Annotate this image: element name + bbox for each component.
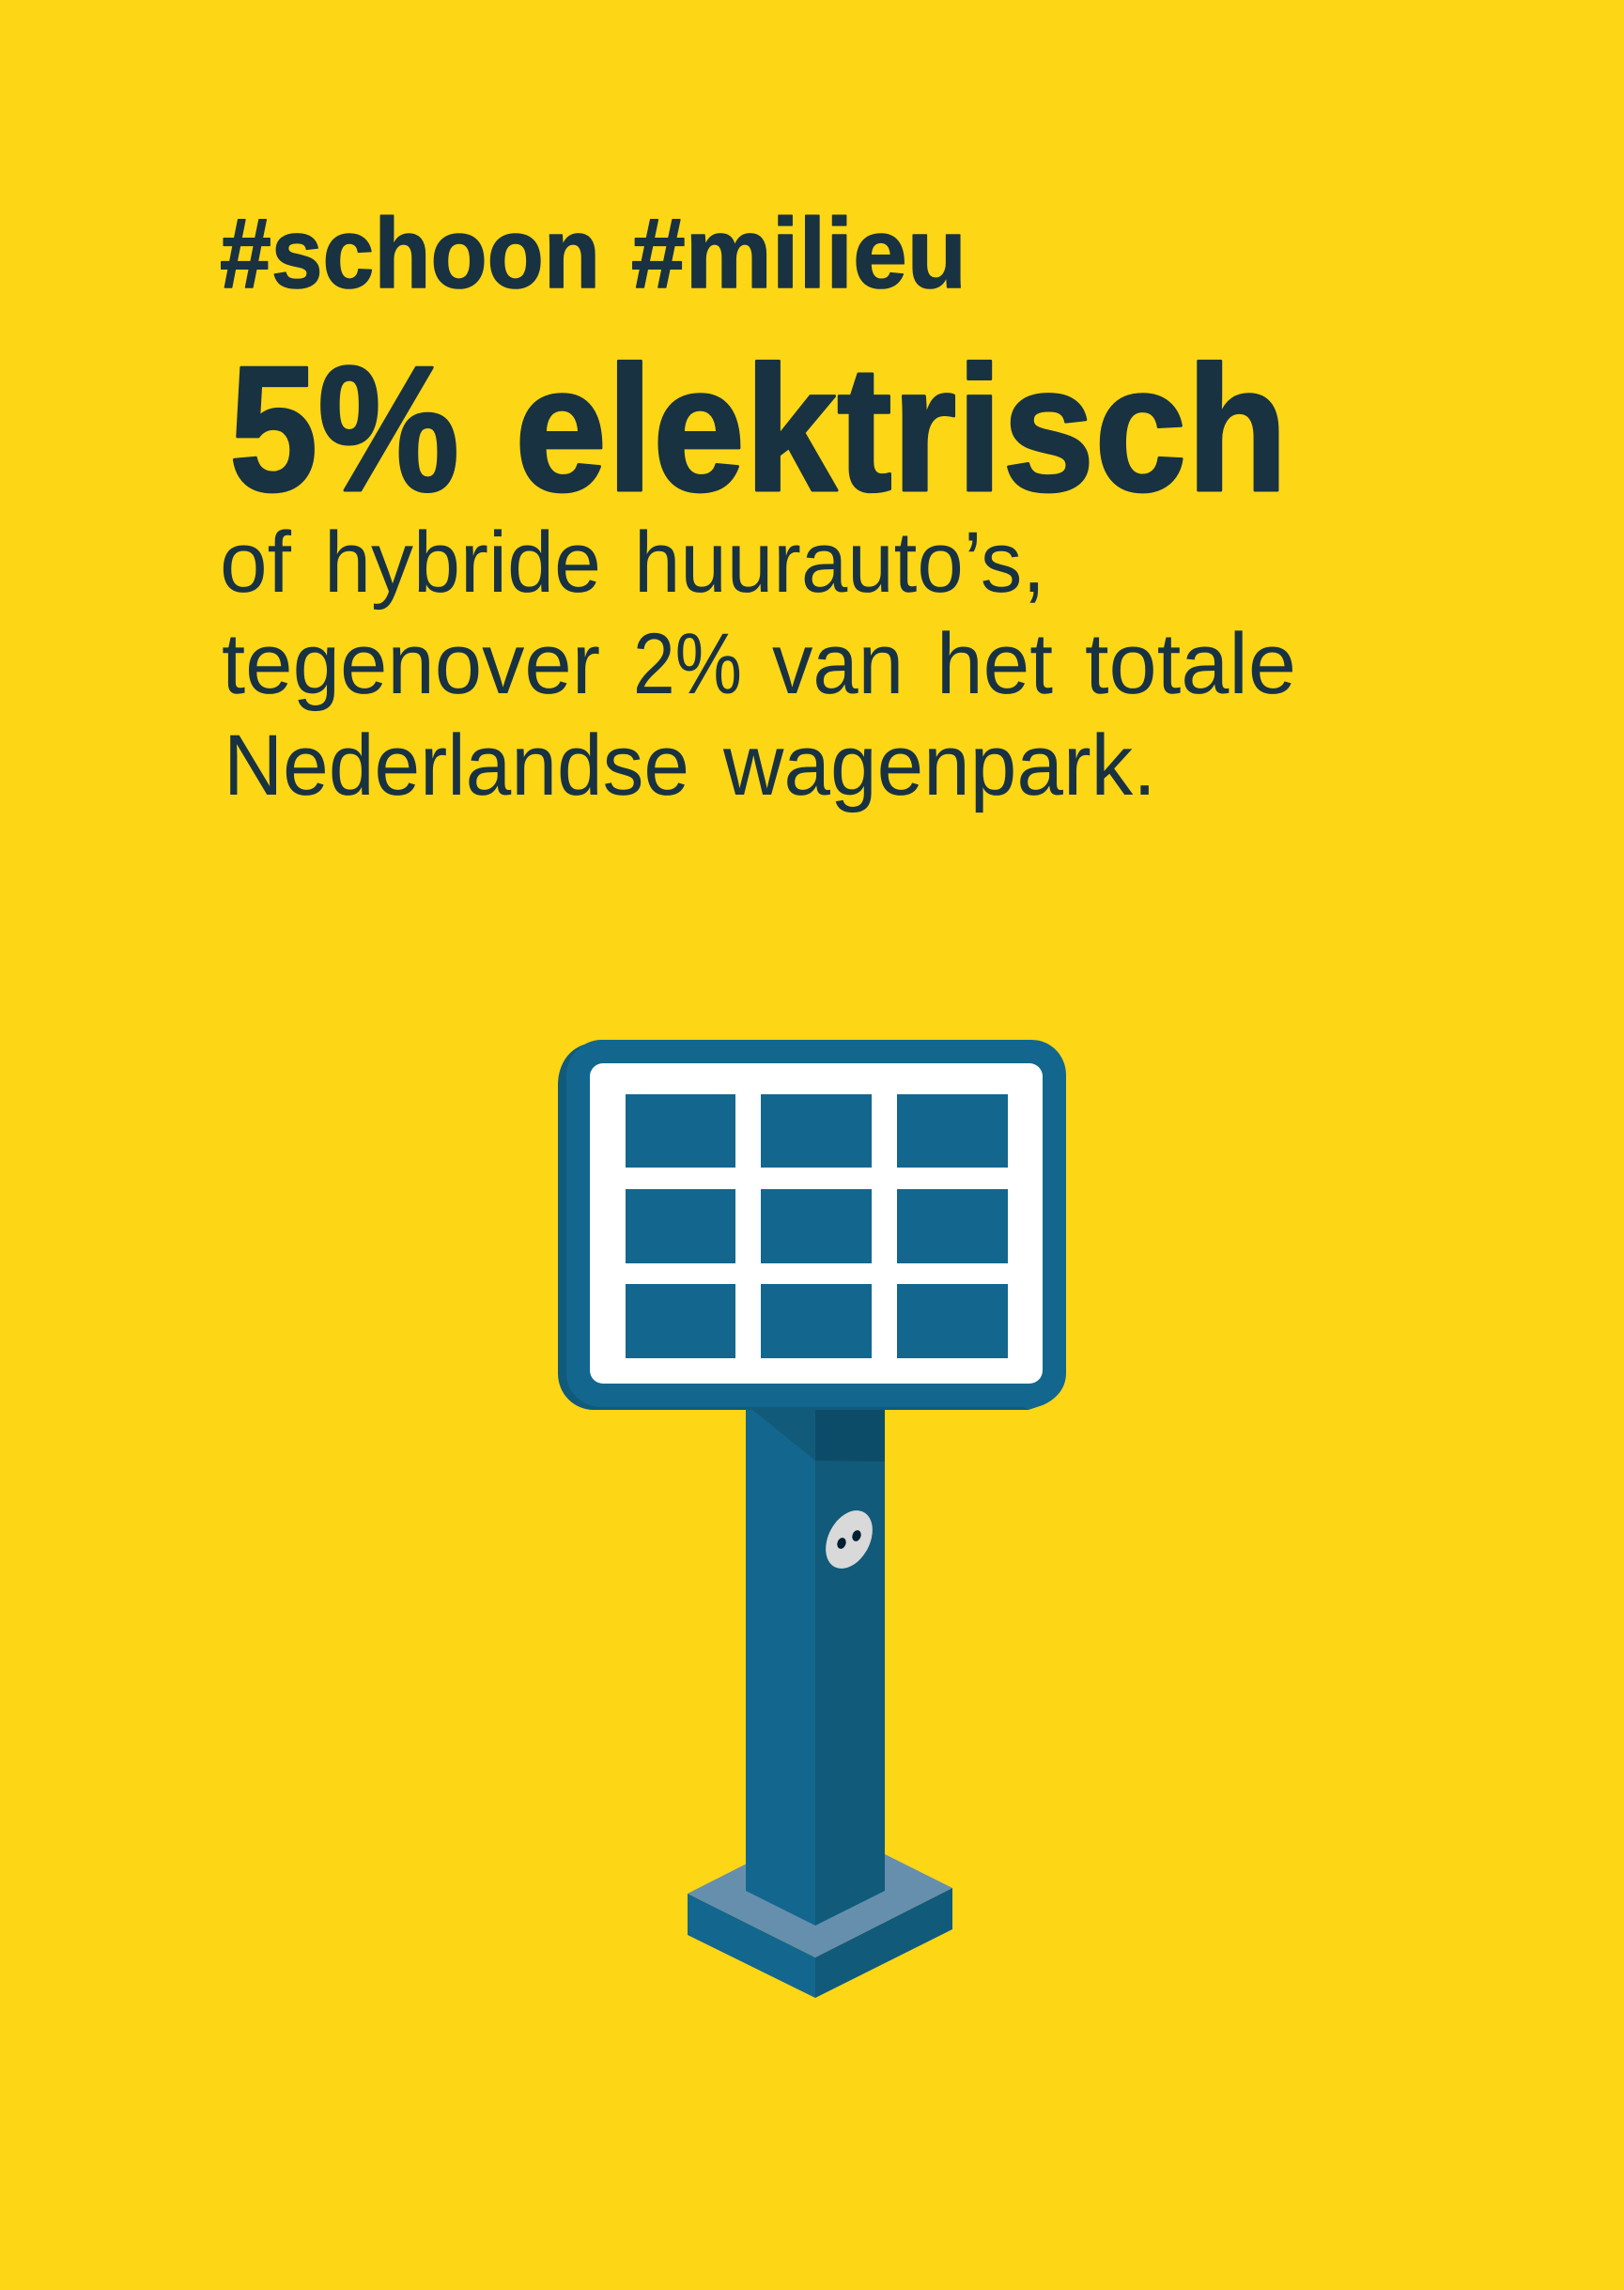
description line 2: tegenover	[222, 616, 600, 712]
description text block	[220, 515, 1296, 813]
illustration: solar charging post	[558, 1040, 1066, 1998]
socket hole left	[836, 1537, 847, 1550]
charging pole	[746, 1404, 885, 1926]
description line 3	[224, 718, 1156, 813]
panel shadow left	[751, 1409, 815, 1461]
pole right face	[815, 1404, 885, 1926]
description line 2: van	[772, 616, 904, 712]
base right side	[815, 1888, 952, 1998]
base plate	[688, 1824, 952, 1998]
panel white surface	[590, 1063, 1043, 1384]
power socket	[816, 1503, 882, 1576]
panel shadow right	[815, 1409, 885, 1462]
hashtag milieu: #milieu	[631, 198, 967, 309]
word elektrisch: elektrisch	[515, 330, 1288, 529]
description line 2: 2%	[633, 616, 742, 712]
percentage: 5%	[229, 330, 459, 529]
description line 1: of	[220, 515, 291, 611]
description line 2: het	[936, 616, 1053, 712]
description line 1: huurauto’s,	[634, 515, 1045, 611]
panel frame	[566, 1040, 1066, 1410]
base left side	[688, 1894, 815, 1998]
hashtags heading	[220, 198, 967, 309]
socket plate	[816, 1503, 882, 1576]
solar cells grid	[626, 1094, 1008, 1358]
solar panel	[558, 1040, 1066, 1410]
pole left face	[746, 1404, 815, 1926]
description line 2: totale	[1085, 616, 1296, 712]
description line 1: hybride	[324, 515, 601, 611]
main statistic heading	[229, 330, 1288, 529]
description line 1	[220, 515, 1045, 611]
description line 2	[222, 616, 1296, 712]
hashtag schoon: #schoon	[220, 198, 600, 309]
description line 3: Nederlandse	[224, 718, 689, 813]
panel back edge	[558, 1040, 1029, 1410]
description line 3: wagenpark.	[722, 718, 1156, 813]
socket hole right	[851, 1529, 862, 1542]
base top surface	[688, 1824, 952, 1957]
